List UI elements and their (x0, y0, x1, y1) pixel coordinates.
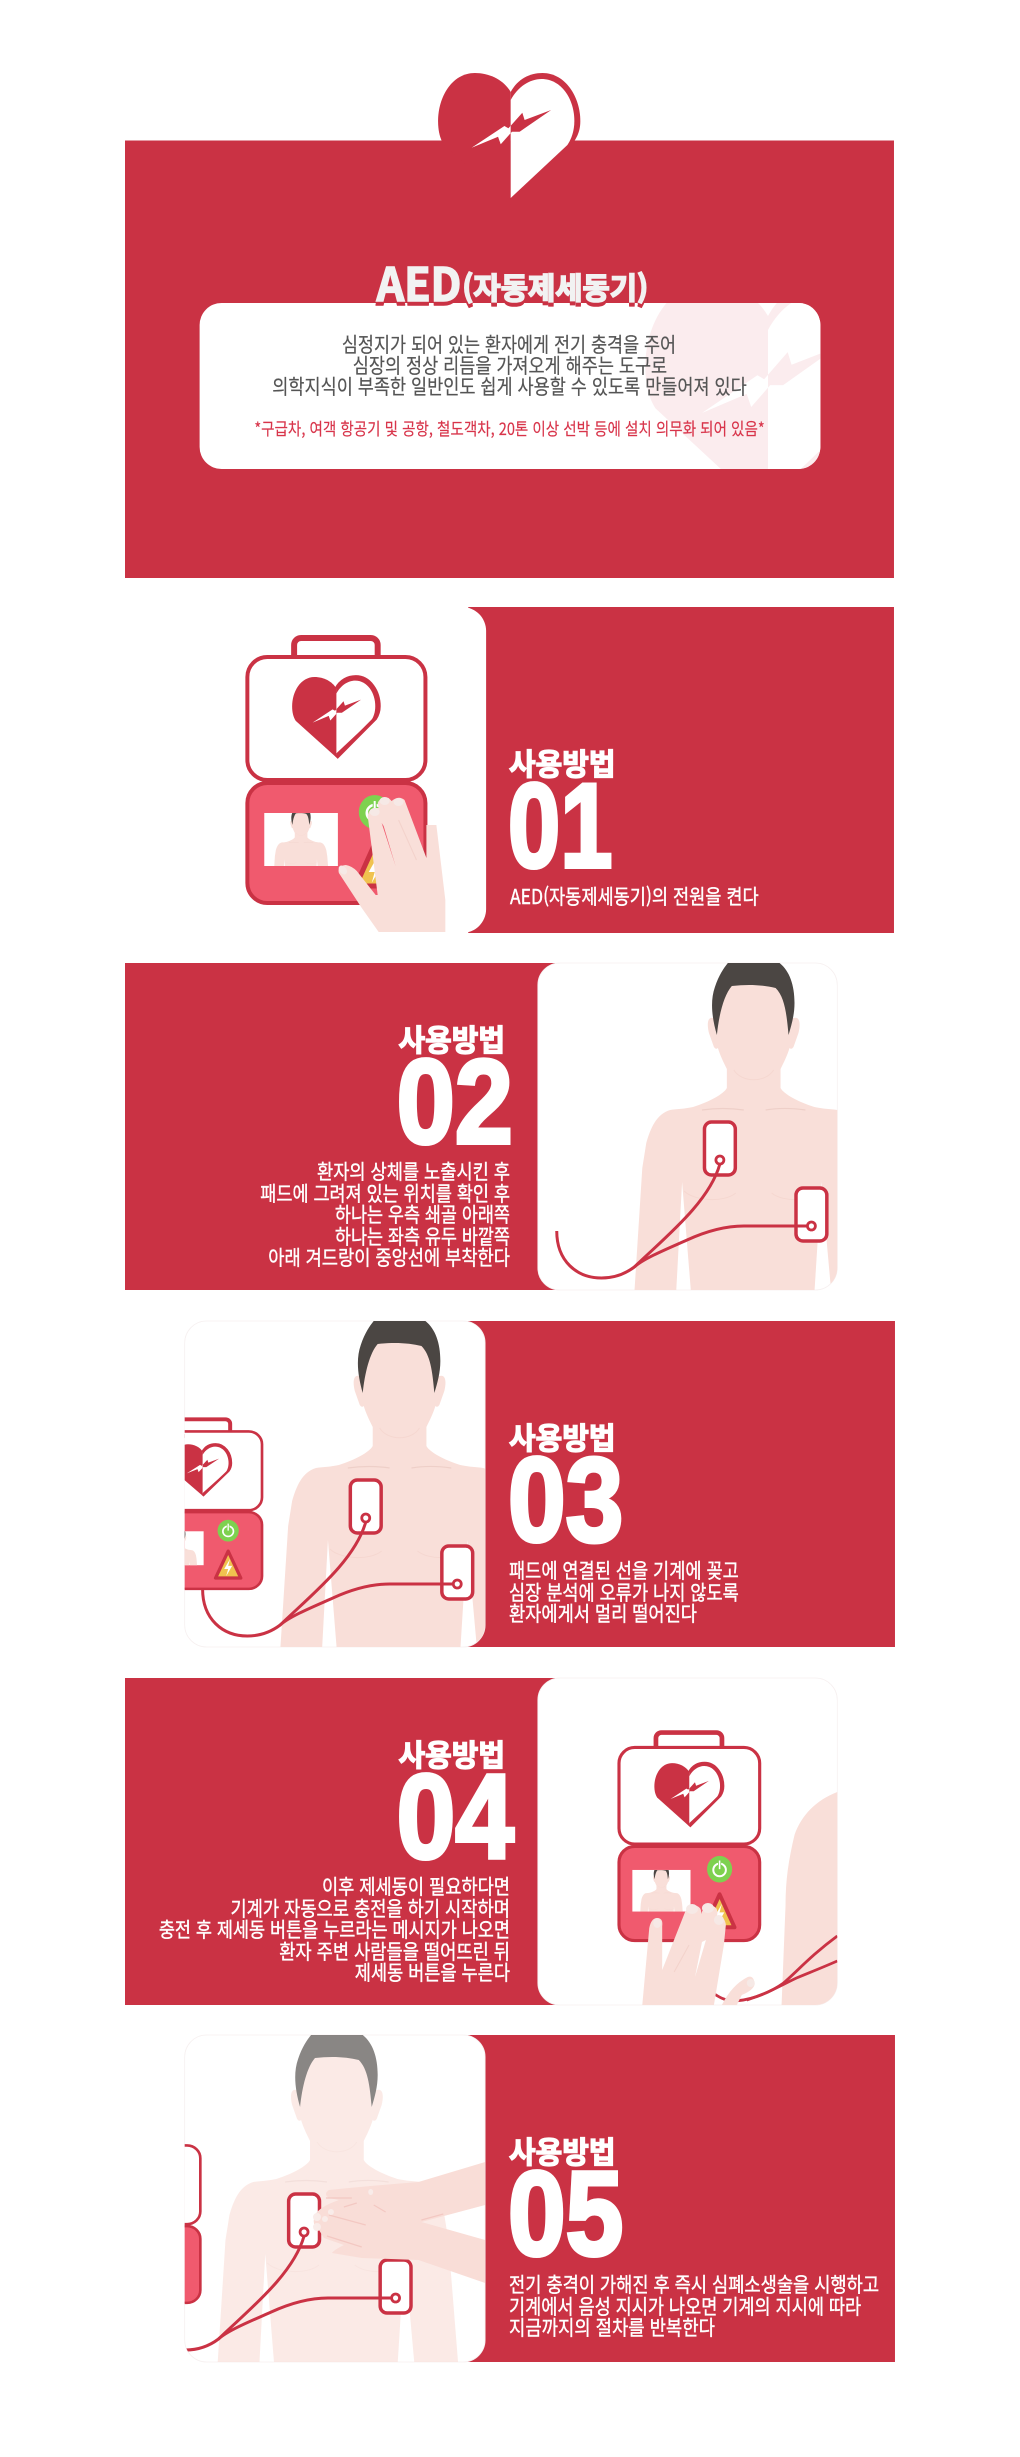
icon: watermark heart (646, 303, 820, 469)
panel: step 01 (185, 607, 894, 933)
panel: step 02 (125, 959, 875, 1293)
heading: step 04: 사용방법 (399, 1731, 505, 1775)
illustration: kit, hand and body (619, 1733, 841, 2005)
icon: AED kit (247, 638, 425, 903)
text: step 03: 심장 분석에 오류가 나지 않도록 (509, 1576, 739, 1606)
text: step 02: 아래 겨드랑이 중앙선에 부착한다 (268, 1241, 510, 1271)
text: step 02: 패드에 그려져 있는 위치를 확인 후 (260, 1177, 510, 1207)
note text: *구급차, 여객 항공기 및 공항, 철도객차, 20톤 이상 선박 등에 설치 의무화 되어 있음* (254, 415, 765, 440)
CPR hands (313, 2162, 485, 2283)
text: step 05: 지금까지의 절차를 반복한다 (509, 2311, 715, 2341)
text: step 04: 환자 주변 사람들을 떨어뜨린 뒤 (279, 1935, 510, 1965)
text: step 03: 패드에 연결된 선을 기계에 꽂고 (509, 1554, 739, 1584)
number 04: 04 (397, 1751, 514, 1884)
number 03: 03 (508, 1434, 623, 1567)
text: step 02: 하나는 좌측 유두 바깥쪽 (335, 1220, 510, 1250)
title: AED: AED (376, 249, 461, 315)
description text: 심장의 정상 리듬을 가져오게 해주는 도구로 (353, 349, 667, 379)
page layout (82, 73, 895, 2365)
number 05: 05 (508, 2148, 623, 2281)
illustration: man, pads and kit (184, 1321, 485, 1647)
text: step 05 (509, 2268, 879, 2341)
cables (713, 1936, 837, 2001)
heading: step 01: 사용방법 (509, 740, 615, 784)
text: step 04: 이후 제세동이 필요하다면 (322, 1870, 510, 1900)
number 02: 02 (397, 1036, 513, 1169)
hand pressing shock button (642, 1903, 755, 2005)
panel: step 05 (184, 2034, 895, 2362)
title: AED (376, 249, 648, 315)
text: step 02: 하나는 우측 쇄골 아래쪽 (335, 1198, 510, 1228)
heading: step 05: 사용방법 (509, 2128, 615, 2172)
text: step 05: 기계에서 음성 지시가 나오면 기계의 지시에 따라 (509, 2290, 861, 2320)
text: step 04 (159, 1870, 510, 1986)
text: step 04: 충전 후 제세동 버튼을 누르라는 메시지가 나오면 (159, 1913, 510, 1943)
text: step 03 (509, 1554, 739, 1627)
text: step 05: 전기 충격이 가해진 후 즉시 심폐소생술을 시행하고 (509, 2268, 879, 2298)
text: step 01: AED(자동제세동기)의 전원을 켠다 (510, 880, 759, 910)
description text: 의학지식이 부족한 일반인도 쉽게 사용할 수 있도록 만들어져 있다 (272, 370, 747, 400)
panel: step 03 (143, 1317, 895, 1651)
text: step 04: 기계가 자동으로 충전을 하기 시작하며 (230, 1892, 510, 1922)
icon: AED heart (438, 73, 580, 205)
text: step 03: 환자에게서 멀리 떨어진다 (509, 1597, 697, 1627)
text: step 04: 제세동 버튼을 누른다 (355, 1956, 510, 1986)
illustration: man, pads and CPR hands (184, 2035, 485, 2362)
card: AED description (200, 303, 820, 469)
description text (272, 328, 747, 400)
panel: step 04 (125, 1678, 841, 2005)
title: AED: (자동제세동기) (462, 264, 648, 308)
text: step 02 (260, 1155, 510, 1271)
icon: hand pressing power (337, 797, 445, 932)
number 01: 01 (508, 760, 612, 893)
heading: step 03: 사용방법 (509, 1414, 615, 1458)
description text: 심정지가 되어 있는 환자에게 전기 충격을 주어 (342, 328, 676, 358)
AED kit (619, 1733, 760, 1941)
panel: AED intro (125, 140, 894, 578)
AED infographic canvas (125, 73, 895, 2362)
heading: step 02: 사용방법 (399, 1016, 505, 1060)
illustration: man with pads (555, 963, 838, 1290)
text: step 02: 환자의 상체를 노출시킨 후 (317, 1155, 510, 1185)
patient body edge (782, 1792, 841, 2005)
